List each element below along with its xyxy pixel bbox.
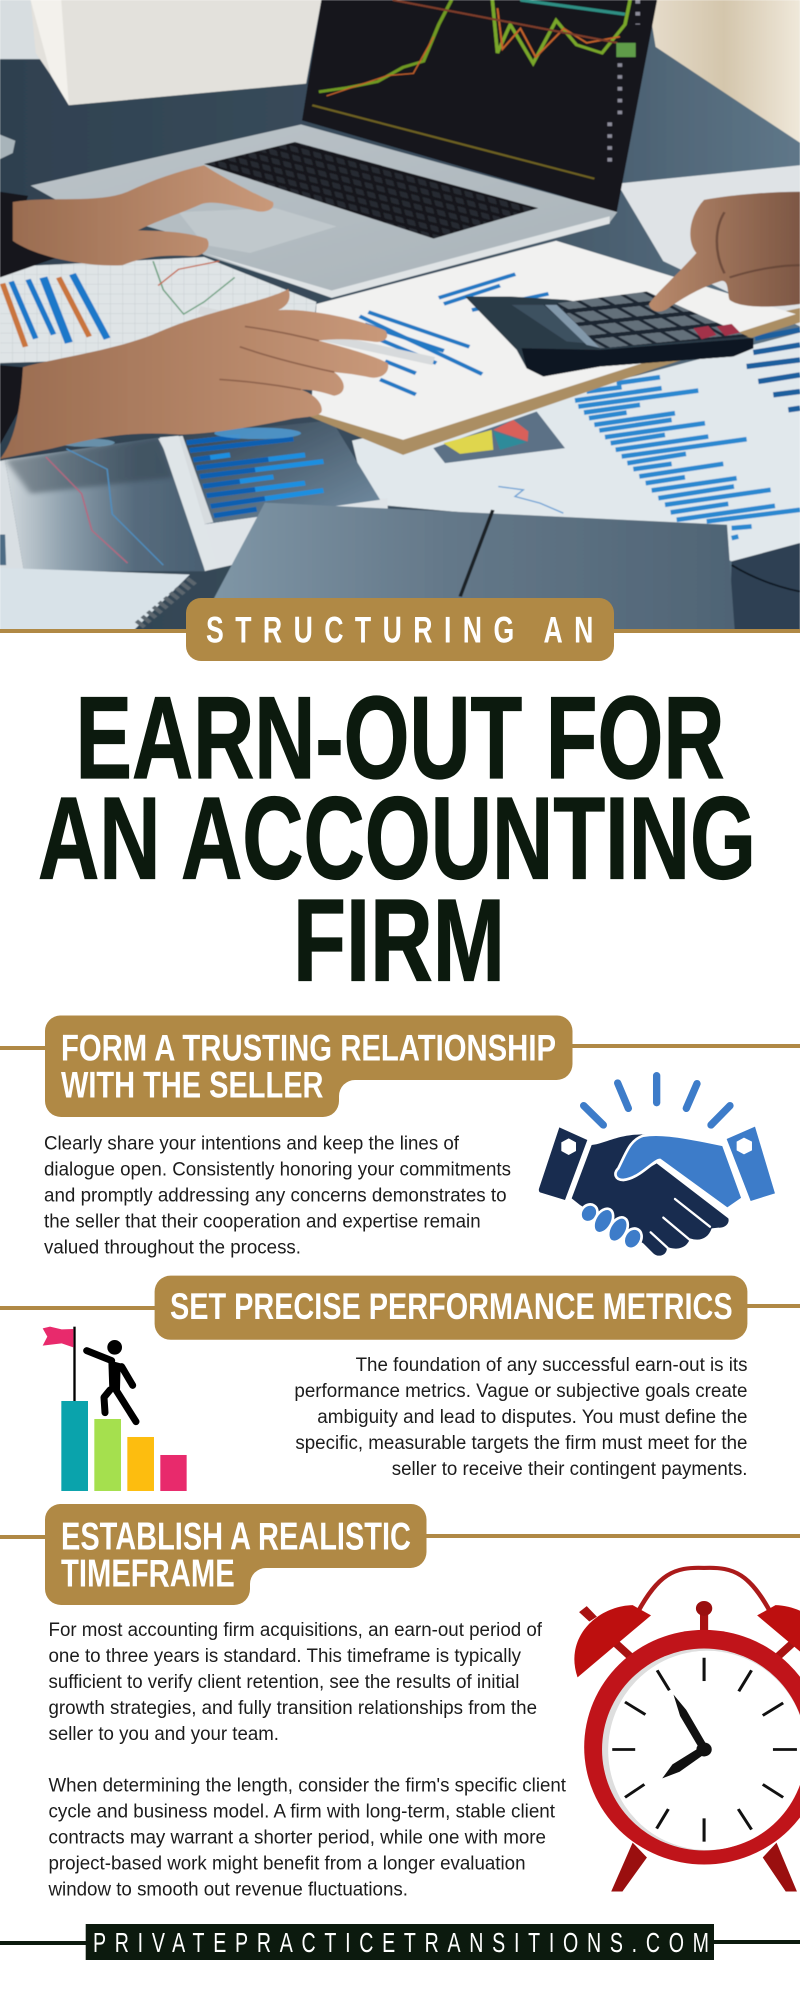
papers [0,257,316,363]
section 2 rule [0,1306,800,1308]
section 2 body text: The foundation of any successful earn-out is its [356,1355,748,1376]
section 1 body text: and promptly addressing any concerns demonstrates to [44,1186,507,1206]
section 3 heading pill [45,1504,426,1605]
section 3 body text: sufficient to verify client retention, see the results of initial [48,1672,519,1693]
icon: handshake [539,1076,775,1256]
section 1 body text: the seller that their cooperation and expertise remain [44,1212,481,1232]
section 3 body text [48,1620,567,1901]
calculator [465,292,753,377]
line chart on slate paper [46,457,128,563]
blue bars on clipboard [360,274,548,395]
section 3 body text: contracts may warrant a shorter period, while one with more [48,1828,546,1848]
section 3 rule [0,1536,800,1537]
two-tone bars on middle paper [187,437,323,516]
icon: red alarm clock [574,1568,800,1891]
section 3 body text: one to three years is standard. This timeframe is typically [48,1646,521,1667]
section 1 body text: dialogue open. Consistently honoring your commitments [44,1160,511,1180]
section 1 heading pill: FORM A TRUSTING RELATIONSHIP [61,1028,556,1068]
laptop [302,0,657,214]
section 2 body text: performance metrics. Vague or subjective goals create [294,1381,748,1402]
hero photo: hands working with laptop, calculator and charts [0,0,800,636]
title [38,672,756,1006]
section 3 heading pill: TIMEFRAME [61,1553,235,1596]
hand upper right [649,192,800,312]
section 1 heading pill [45,1016,572,1117]
section 3 body text: cycle and business model. A firm with long-term, stable client [48,1802,556,1822]
pill: STRUCTURING AN [186,598,614,661]
section 1 body text: valued throughout the process. [44,1238,301,1258]
section 3 heading pill: ESTABLISH A REALISTIC [61,1515,411,1558]
hand upper left [0,192,56,277]
title: FIRM [293,875,505,1006]
section 2 body text: specific, measurable targets the firm must meet for the [295,1433,748,1454]
zoom-space group for lower right paper [433,330,800,538]
footer rule [0,1942,800,1943]
section 3 body text: growth strategies, and fully transition relationships from the [48,1698,537,1719]
section 3 body text: seller to you and your team. [48,1724,279,1745]
section 2 body text: seller to receive their contingent payments. [392,1459,748,1480]
section 1 rule [0,1046,800,1048]
footer website banner: PRIVATEPRACTICETRANSITIONS.COM [93,1928,709,1959]
bottom items [0,568,190,630]
section 1 body text [44,1134,511,1258]
section 1 heading pill: WITH THE SELLER [61,1064,324,1105]
section 3 body text: window to smooth out revenue fluctuations. [48,1880,408,1901]
clipboard [309,308,800,455]
section 2 heading pill [155,1276,747,1340]
pill: STRUCTURING AN: STRUCTURING AN [206,609,593,651]
section 2 body text: ambiguity and lead to disputes. You must define the [317,1407,748,1428]
hand lower left with pen [0,365,23,445]
gold rule under photo [0,629,800,633]
icon: person stepping on bar chart with flag [43,1327,187,1491]
section 3 body text: When determining the length, consider the firm's specific client [48,1775,567,1796]
section 3 body text: For most accounting firm acquisitions, an earn-out period of [48,1620,543,1641]
section 3 body text: project-based work might benefit from a longer evaluation [48,1854,526,1875]
section 2 body text [294,1355,748,1480]
section 1 body text: Clearly share your intentions and keep the lines of [44,1134,460,1154]
left paper chart [3,261,235,347]
